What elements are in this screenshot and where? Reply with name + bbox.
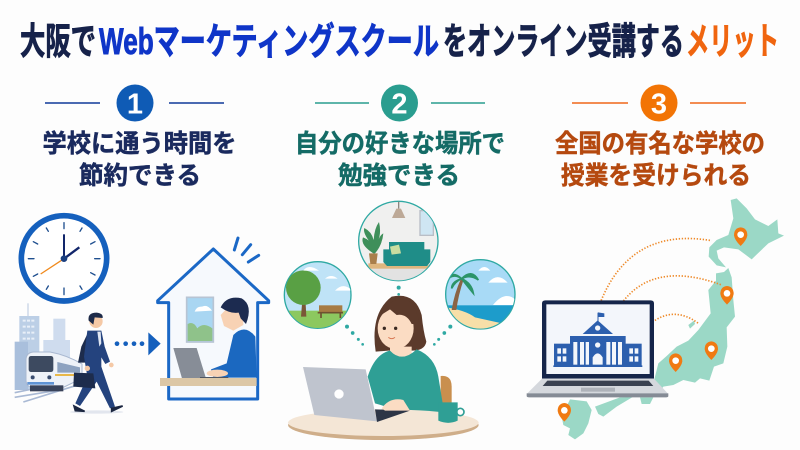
panel: merit 1 heading: 学校に通う時間を (42, 130, 236, 158)
panel: merit 3 heading: 3 (651, 88, 667, 120)
rail tracks (15, 385, 77, 402)
icon: laptop (303, 367, 410, 422)
icon: beach circle (446, 260, 516, 331)
icon: laptop with school (527, 300, 668, 397)
icon: house with remote worker (158, 238, 269, 399)
panel: merit 1 heading: 1 (127, 88, 143, 120)
panel: merit 1 heading (42, 84, 236, 190)
arrow: dotted commute arrow (115, 332, 161, 355)
city buildings (15, 303, 70, 390)
icon: location pins (558, 227, 747, 422)
panel: merit 2 heading: 自分の好きな場所で (295, 130, 505, 158)
icon: train (26, 352, 82, 391)
illustration: work anywhere (284, 200, 516, 440)
panel: merit 2 heading (295, 84, 505, 190)
dotted connectors (345, 286, 452, 346)
illustration: commute to home (15, 216, 269, 414)
icon: room circle (358, 200, 438, 283)
title: Webマーケティングスクール (99, 21, 439, 62)
icon: coffee mug (438, 402, 464, 423)
icon: woman at laptop (368, 296, 452, 413)
panel: merit 3 heading (555, 84, 765, 190)
icon: park circle (284, 262, 352, 331)
icon: walking businessman (70, 313, 123, 414)
panel: merit 3 heading: 全国の有名な学校の (555, 130, 765, 158)
illustration: Japan map with online school (527, 198, 784, 439)
map of Japan (562, 198, 784, 439)
icon: clock (21, 216, 107, 301)
panel: merit 2 heading: 勉強できる (338, 162, 460, 190)
title: 大阪で (20, 21, 96, 62)
panel: merit 2 heading: 2 (391, 88, 408, 120)
title (20, 21, 779, 62)
panel: merit 3 heading: 授業を受けられる (561, 162, 751, 190)
table (288, 409, 479, 440)
dotted arcs (600, 239, 722, 324)
panel: merit 1 heading: 節約できる (79, 162, 201, 190)
icon: school building (553, 312, 642, 367)
